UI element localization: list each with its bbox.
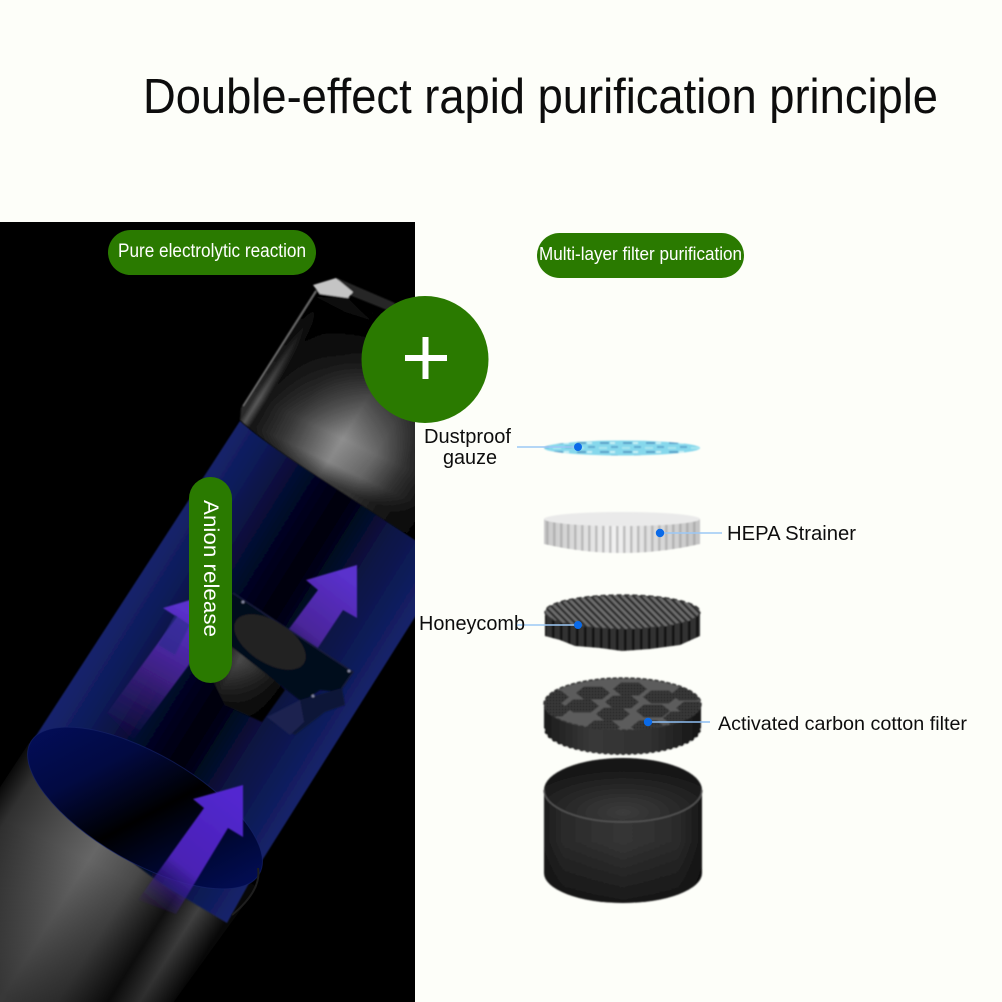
icon: plus circle: [362, 296, 488, 423]
badge: multi-layer filter purification: Multi-layer filter purification: [539, 243, 742, 264]
filter: activated carbon cotton: [535, 678, 710, 755]
label: honeycomb: Honeycomb: [419, 612, 525, 635]
filter: HEPA strainer: [544, 512, 722, 553]
lower cylinder opening: [27, 727, 263, 889]
badge: multi-layer filter purification: [537, 233, 744, 278]
badge: pure electrolytic reaction: [108, 230, 316, 275]
title: Double-effect rapid purification principle: [143, 70, 938, 124]
badge: pure electrolytic reaction: Pure electrolytic reaction: [118, 241, 306, 262]
label: dustproof gauze: Dustproof: [424, 426, 511, 448]
arrow: upper right: [288, 564, 358, 648]
part: filter cup: [544, 758, 702, 903]
arrow: rear left: [108, 599, 190, 734]
label: dustproof gauze: gauze: [443, 447, 497, 469]
lower cylinder front rim: [232, 868, 258, 915]
icon: fan: [158, 593, 353, 735]
upper cylinder: [240, 278, 420, 543]
lower cylinder body: [0, 744, 224, 1002]
filter: dustproof gauze: [517, 440, 700, 456]
label: activated carbon cotton filter: Activated carbon cotton filter: [718, 713, 968, 735]
filter: honeycomb: [517, 595, 700, 651]
panel background: [0, 222, 415, 1002]
badge: anion release: [189, 477, 232, 683]
panel: electrolytic reaction device: [0, 222, 420, 1002]
badge: anion release: Anion release: [199, 500, 222, 637]
arrow: lower: [138, 785, 243, 914]
blue light beam: [30, 421, 420, 923]
label: HEPA strainer: HEPA Strainer: [727, 522, 856, 545]
